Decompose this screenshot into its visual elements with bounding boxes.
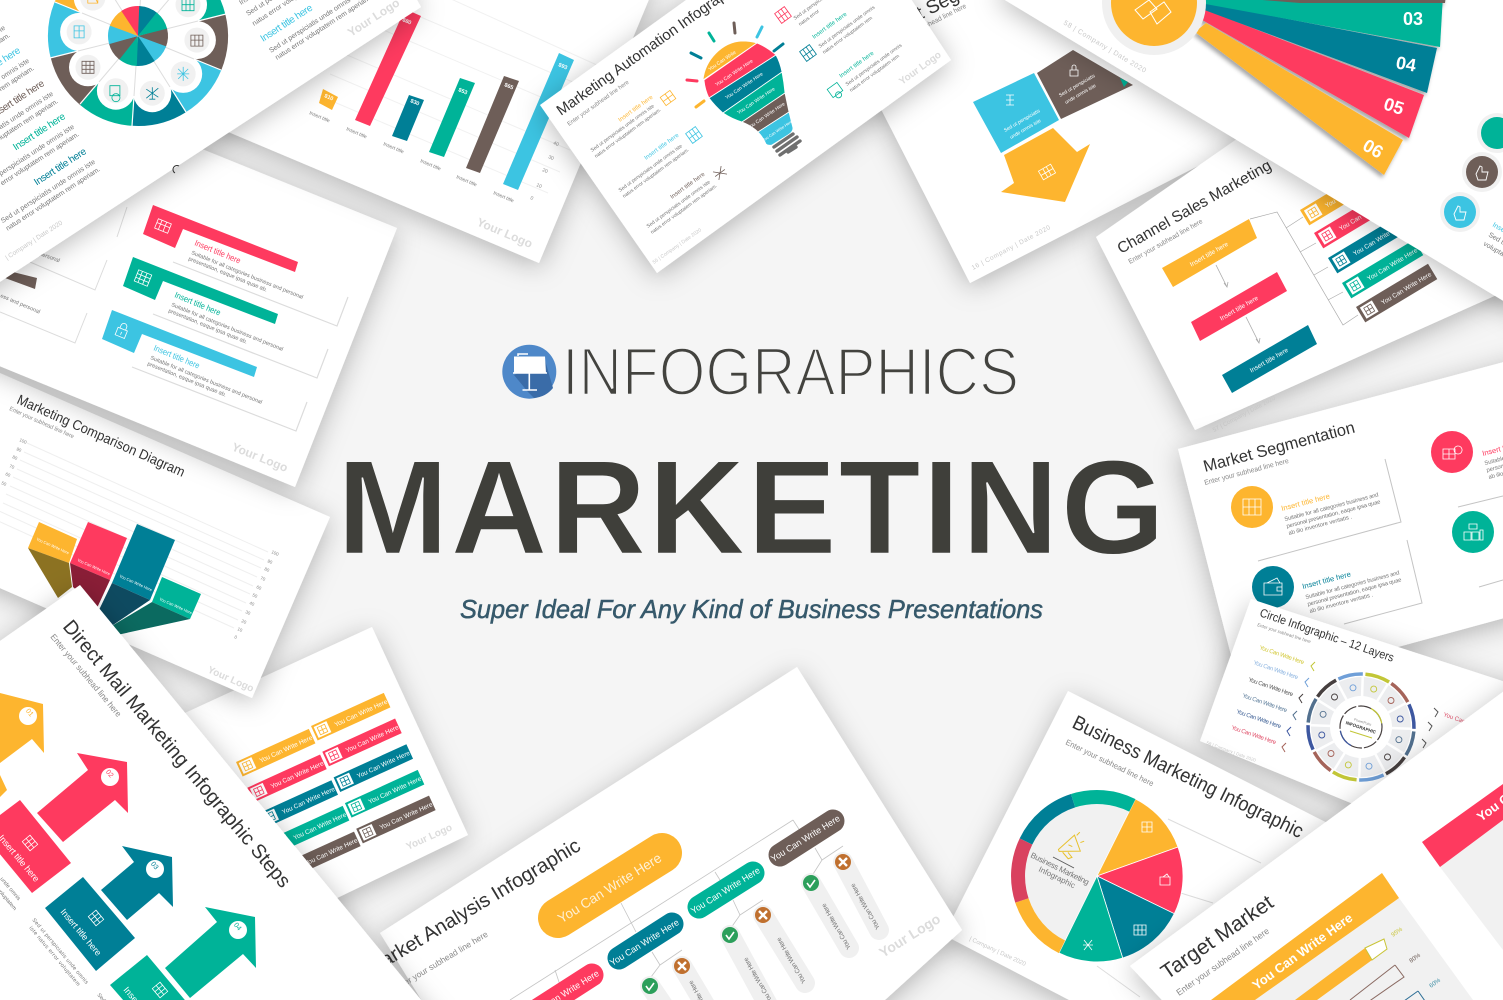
item: cyan: presentation, eaque ipsa quae ab.	[146, 361, 227, 399]
option labels: You Can Write Here	[849, 882, 882, 930]
card: blue: Suitable for all categories business and	[1305, 570, 1400, 601]
gray card	[1255, 898, 1473, 1000]
card: yellow: ab illo inventore veritatis .	[1288, 514, 1353, 537]
subhead: Enter your subhead line here	[1203, 456, 1290, 487]
check and cross icons	[642, 854, 851, 994]
left labels	[1230, 645, 1305, 746]
subhead fragment: Enter your subhead line here	[889, 3, 968, 48]
left labels: Sed ut perspiciatis unde omnis iste	[590, 103, 656, 154]
flow boxes	[1162, 219, 1317, 393]
panel: target market	[1130, 672, 1503, 1000]
subhead: Enter your subhead line here	[1174, 926, 1271, 998]
arrow 03: 03	[149, 861, 159, 871]
card: yellow: Suitable for all categories business and	[1284, 492, 1379, 523]
category labels: Insert title	[308, 110, 331, 124]
icon: yellow circle	[1102, 0, 1206, 55]
logo text: Your Logo	[876, 910, 943, 961]
bulb: You Can Write Here	[761, 118, 794, 143]
right labels: natus error voluptatem rem	[822, 15, 874, 56]
yellow arrow	[1001, 128, 1090, 202]
left labels: Insert title here	[618, 94, 655, 124]
category labels: Insert title	[492, 190, 515, 204]
footer text: 58 | Company | Date 2020	[1206, 740, 1257, 763]
logo icon: keynote	[502, 345, 556, 399]
axis labels: 70	[260, 575, 267, 582]
right labels: natus error voluptatem rem	[849, 53, 901, 94]
right text fragment	[1482, 222, 1503, 258]
progress bars: 95%	[1391, 926, 1404, 939]
right labels: Sed ut perspiciatis unde omnis	[845, 42, 904, 88]
pie chart	[1018, 797, 1183, 962]
axis labels: 70	[9, 463, 16, 470]
fan numbers: 06	[1359, 135, 1387, 162]
axis labels: 80	[12, 454, 19, 461]
right column bars	[311, 693, 436, 843]
pills	[539, 821, 833, 1000]
3D block chart	[28, 522, 201, 635]
axis labels: 50	[1, 480, 8, 487]
left text blocks: Insert title here	[11, 111, 68, 153]
subhead: Enter your subhead line here	[48, 632, 124, 719]
footer text: 58 | Company | Date 2020	[1062, 20, 1147, 75]
pill labels: You Can Write Here	[689, 865, 762, 916]
axis labels: 20	[241, 618, 248, 625]
left labels: Sed ut perspiciatis unde omnis iste	[618, 143, 684, 194]
panel: channel sales marketing	[1096, 80, 1503, 434]
logo text: Your Logo	[206, 665, 255, 695]
heading: Business Marketing Infographic	[1069, 712, 1307, 843]
3D block chart: You Can Write Here	[159, 596, 194, 616]
panel: market segmentation	[1178, 355, 1503, 690]
fan numbers: 04	[1394, 53, 1418, 76]
panel: insert title list	[0, 128, 397, 487]
item: cyan	[102, 310, 307, 431]
panel: direct mail marketing steps	[0, 585, 450, 1000]
arrow 01	[0, 693, 44, 797]
wedge icons	[1083, 822, 1170, 950]
progress bars: 60%	[1429, 977, 1442, 990]
arrow 02	[0, 753, 128, 912]
pie centre text: Infographic	[1037, 865, 1077, 890]
axis labels: 40	[249, 600, 256, 607]
axis labels	[1, 437, 280, 640]
bulb: You Can Write	[708, 50, 738, 73]
3D block chart: You Can Write Here	[119, 573, 154, 593]
block labels: unde omnis iste	[1009, 118, 1043, 141]
item: red	[143, 205, 348, 326]
heading: marketing comparison: Marketing Comparison Diagram	[15, 391, 188, 480]
value labels: $10	[323, 93, 334, 102]
axis labels: 30	[245, 609, 252, 616]
bulb: You Can Write Here	[714, 58, 755, 88]
right labels	[1422, 708, 1466, 748]
left column bars: You Can Write Here	[259, 734, 314, 765]
item: red: presentation, eaque ipsa quae ab.	[187, 256, 268, 294]
logo text: Your Logo	[897, 50, 944, 87]
heading: Market Segmentation	[1201, 419, 1357, 476]
footer text: 55 | Company | Date 2020	[652, 227, 703, 266]
right column bars: You Can Write Here	[356, 750, 412, 780]
right labels: Sed ut perspiciatis unde omnis	[818, 4, 877, 50]
circle diagram	[1287, 653, 1435, 801]
card: blue: Insert title here	[1301, 569, 1352, 591]
footer text: 57 | Company | Date 2020	[1212, 395, 1277, 434]
axis labels: 100	[19, 437, 28, 445]
pill labels: You Can Write Here	[555, 850, 664, 926]
list rows: You Can Write Here	[1324, 174, 1377, 210]
card: blue	[1252, 540, 1422, 624]
item: red: Suitable for all categories business and personal	[190, 250, 304, 301]
card: yellow: personal presentation, eaque ipsa quae	[1286, 499, 1381, 530]
item: cyan: Suitable for all categories business and personal	[149, 355, 263, 406]
list rows: You Can Write Here	[1366, 247, 1419, 283]
flow boxes: Insert title here	[1219, 295, 1260, 322]
logo text: Your Logo	[475, 215, 535, 251]
card: red	[1431, 431, 1503, 507]
panel: fan numbers	[1000, 0, 1503, 317]
item: cyan: Insert title here	[152, 343, 202, 371]
logo text: Your Logo	[230, 440, 290, 475]
block labels: Sed ut perspiciatis	[1058, 73, 1097, 99]
title: marketing: MARKETING	[337, 434, 1165, 582]
item: red: Insert title here	[193, 238, 243, 266]
right column bars: You Can Write Here	[367, 775, 423, 806]
subhead: Enter your subhead line here	[1064, 738, 1156, 789]
circle diagram: PowerPoint	[1353, 718, 1372, 727]
left labels: natus error voluptatem rem aperiam.	[622, 147, 691, 200]
flow boxes: Insert title here	[1189, 241, 1230, 268]
green sliver	[1120, 78, 1128, 87]
right labels: Insert title here	[812, 11, 849, 41]
axis labels: 90	[16, 446, 23, 453]
option labels: You Can Write Here	[775, 936, 808, 984]
axis labels: 0	[234, 634, 238, 640]
progress bars: 80%	[1409, 952, 1422, 965]
arrow 03: Insert title here	[58, 907, 103, 958]
item: green	[123, 257, 328, 378]
pill labels: You Can Write Here	[608, 917, 681, 968]
left labels: You Can Write Here	[1258, 645, 1305, 666]
left column bars: You Can Write Here	[270, 760, 325, 790]
connectors	[510, 820, 843, 1000]
axis numbers: 10	[535, 182, 543, 190]
fan blades	[1195, 0, 1446, 175]
gray card with red header	[1422, 782, 1503, 950]
arrow 03	[27, 846, 173, 988]
tagline: Super Ideal For Any Kind of Business Presentations	[460, 594, 1043, 624]
panel: bar chart	[200, 0, 655, 263]
footer text: | Company | Date 2020	[4, 219, 64, 262]
left labels: You Can Write Here	[1241, 693, 1288, 714]
axis labels: 60	[256, 584, 263, 591]
arrow 03: Sed ut perspiciatis unde omnis	[30, 917, 89, 986]
progress bars	[1295, 926, 1442, 1000]
list rows	[1300, 167, 1437, 322]
yellow header: You Can Write Here	[1249, 910, 1355, 993]
right column bars: You Can Write Here	[345, 724, 400, 754]
pill labels	[528, 813, 842, 1000]
cyan block	[973, 73, 1059, 153]
card: yellow	[1231, 459, 1401, 561]
item: green: presentation, eaque ipsa quae ab.	[167, 308, 248, 346]
heading: Target Market	[1157, 891, 1278, 984]
category labels: Insert title	[345, 126, 368, 140]
subhead: Enter your subhead line here	[1128, 218, 1204, 266]
heading: Circle Infographic – 12 Layers	[1258, 606, 1396, 665]
arrow 04: 04	[232, 922, 242, 932]
block labels: Sed ut perspiciatis	[1003, 108, 1042, 134]
block labels: unde omnis iste	[1064, 83, 1098, 106]
right labels: natus error	[798, 8, 821, 28]
card: yellow: Insert title here	[1280, 491, 1331, 513]
axis numbers: 0	[529, 195, 534, 202]
left text blocks	[0, 25, 102, 232]
gray option pills	[650, 862, 879, 1000]
value labels: $93	[557, 62, 568, 71]
panel: circle infographic 12 layers	[1200, 599, 1503, 815]
item: green: Suitable for all categories business and personal	[170, 302, 284, 353]
list rows: You Can Write Here	[1352, 222, 1405, 258]
icon: megaphone	[1055, 832, 1088, 861]
left labels: Sed ut perspiciatis unde omnis iste	[646, 179, 712, 230]
bulb	[703, 41, 800, 155]
bulb rays	[687, 23, 783, 107]
panel: segments with arrow	[815, 0, 1340, 283]
axis labels: 100	[271, 549, 280, 557]
option labels	[687, 882, 882, 1000]
arrow 02: 02	[104, 769, 114, 779]
right column bars: You Can Write Here	[334, 698, 389, 729]
option labels: You Can Write Here	[820, 902, 853, 950]
block icons	[1006, 65, 1078, 180]
pie centre text: Business Marketing	[1029, 851, 1091, 887]
title: infographics: INFOGRAPHICS	[562, 334, 1019, 410]
right column bars: You Can Write Here	[379, 801, 434, 832]
value labels: $65	[503, 82, 514, 91]
circle diagram: INFOGRAPHIC	[1345, 720, 1377, 735]
axis numbers: 40	[552, 140, 560, 148]
left column cards	[0, 207, 127, 343]
axis numbers	[529, 140, 560, 202]
value labels: $30	[409, 98, 420, 107]
brown block	[1037, 50, 1133, 119]
left text blocks: Sed ut perspiciatis unde omnis iste	[0, 159, 97, 225]
category labels: Insert title	[382, 141, 405, 155]
small dark mark	[173, 165, 179, 173]
fan numbers	[1359, 9, 1423, 162]
panel: write here table	[185, 627, 468, 925]
panel: marketing comparison diagram	[0, 360, 330, 698]
category labels: Insert title	[419, 158, 442, 172]
left labels: You Can Write Here	[1230, 725, 1277, 746]
value labels	[323, 17, 568, 107]
icons: right circles	[1440, 113, 1503, 232]
panel: market analysis infographic	[362, 667, 962, 1000]
block labels	[1003, 73, 1098, 141]
axis labels: 60	[5, 471, 12, 478]
bulb: You Can Write Here	[736, 86, 777, 116]
left text blocks: Insert title here	[32, 146, 89, 188]
footer text: | Company | Date 2020	[968, 936, 1027, 968]
left labels: Insert title here	[644, 132, 681, 162]
logo text: Your Logo	[405, 822, 454, 853]
wheel chart	[50, 0, 226, 126]
pill labels: You Can Write Here	[769, 813, 842, 864]
category labels	[308, 110, 515, 204]
card: blue: ab illo inventore veritatis .	[1309, 592, 1374, 615]
arrow 01: 01	[24, 708, 34, 718]
left chevrons	[1282, 662, 1315, 752]
right labels	[775, 0, 904, 101]
heading: Channel Sales Marketing	[1115, 157, 1274, 257]
connector tree	[1250, 212, 1358, 325]
axis numbers: 30	[547, 154, 555, 162]
axis labels: 80	[264, 566, 271, 573]
left column bars: You Can Write Here	[304, 837, 359, 868]
3D block chart: You Can Write Here	[36, 536, 71, 556]
axis numbers: 20	[541, 167, 549, 175]
right text blocks: Insert title here	[259, 2, 315, 45]
left column bars	[236, 729, 361, 879]
axis labels: 90	[267, 558, 274, 565]
axis labels: 50	[252, 592, 259, 599]
right labels: Insert title here	[839, 50, 876, 80]
list rows: You Can Write Here	[1380, 271, 1433, 307]
bulb: You Can Write Here	[746, 101, 787, 131]
arrow 04	[95, 907, 256, 1000]
left labels: natus error voluptatem rem aperiam.	[650, 183, 719, 236]
3D block chart: You Can Write Here	[77, 557, 112, 577]
panel: marketing automation bulb	[540, 0, 951, 273]
list rows: You Can Write Here	[1338, 197, 1391, 233]
left column cards: ess and personal	[0, 293, 41, 315]
bars	[319, 9, 574, 190]
left labels: You Can Write Here	[1235, 709, 1282, 730]
arrow 03: iste natus error voluptatem	[27, 925, 81, 988]
fan numbers: 03	[1403, 9, 1423, 29]
subhead: Enter your subhead line here	[391, 929, 490, 994]
item: green: Insert title here	[173, 290, 223, 318]
fan numbers: 05	[1381, 94, 1406, 119]
right labels: You Can	[1442, 712, 1466, 725]
panel: business marketing infographic	[944, 691, 1400, 1000]
yellow header	[1211, 873, 1399, 1000]
bulb: You Can Write Here	[724, 71, 765, 101]
value labels: $53	[457, 87, 468, 96]
left column bars: You Can Write Here	[281, 786, 337, 816]
left labels	[590, 90, 728, 236]
panel: circle wheel	[0, 0, 421, 308]
left labels: natus error voluptatem rem aperiam.	[594, 107, 663, 160]
subhead: marketing comparison: Enter your subhead line here	[8, 406, 75, 441]
left column bars: You Can Write Here	[292, 811, 348, 842]
flow boxes: Insert title here	[1249, 347, 1290, 374]
subhead: Enter your subhead line here	[567, 79, 631, 128]
footer text: 16 | Company | Date 2020	[971, 224, 1052, 272]
heading: Market Analysis Infographic	[362, 835, 584, 980]
axis labels: 10	[237, 626, 244, 633]
heading: Direct Mail Marketing Infographic Steps	[58, 616, 295, 892]
left labels: You Can Write Here	[1247, 677, 1294, 698]
left text blocks: natus error voluptatem rem aperiam.	[5, 166, 102, 232]
card: blue: personal presentation, eaque ipsa quae	[1307, 577, 1402, 608]
left labels: Insert title here	[670, 171, 707, 201]
left column cards: personal	[38, 251, 61, 264]
subhead: Enter your subhead line here	[1257, 622, 1312, 644]
value labels: $80	[401, 17, 412, 26]
card: green	[1452, 511, 1503, 587]
category labels: Insert title	[455, 174, 478, 188]
left labels: You Can Write Here	[1252, 660, 1299, 681]
